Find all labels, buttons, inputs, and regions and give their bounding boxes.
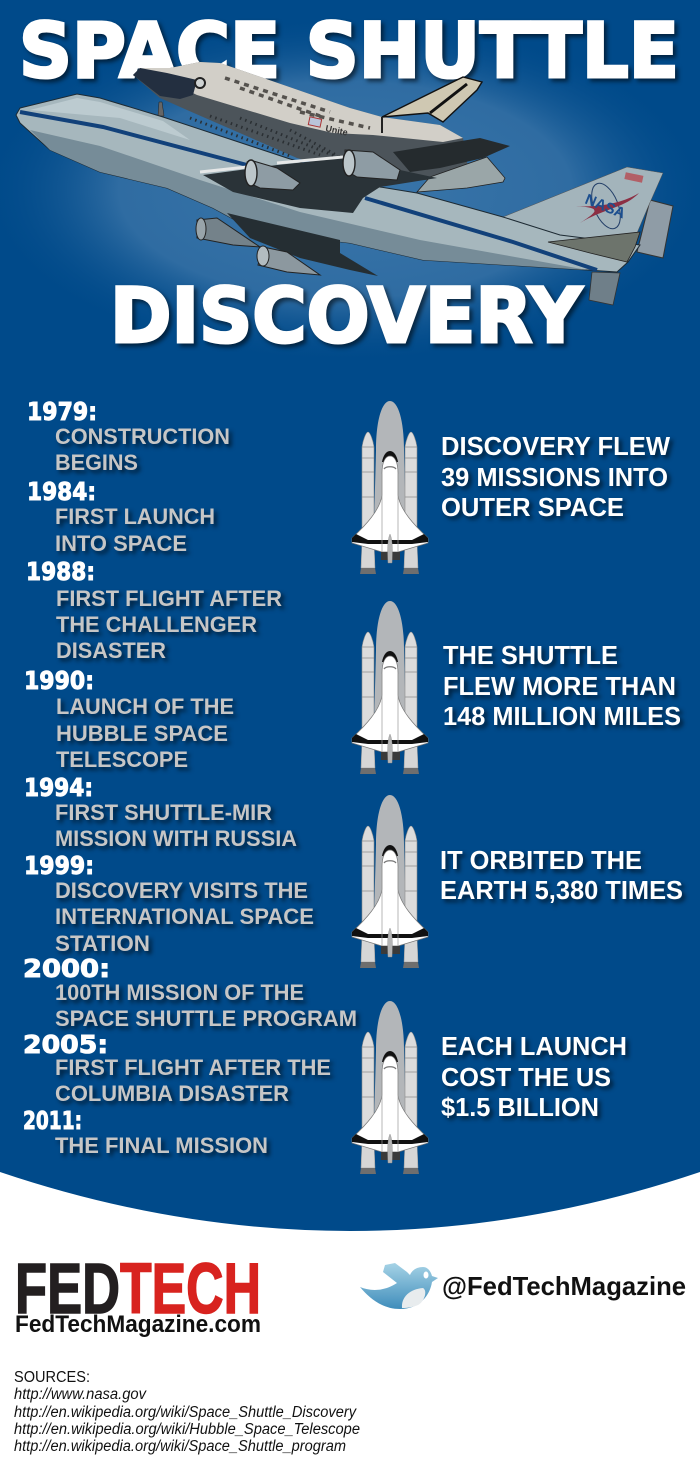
sources: http://en.wikipedia.org/wiki/Space_Shuttle_Discovery [14,1404,357,1421]
sources: SOURCES: [14,1369,90,1386]
2005 entry: COLUMBIA DISASTER [55,1081,289,1106]
2005 entry: 2005: [23,1030,108,1059]
FedTech logo: FED [15,1250,120,1329]
2000 entry [23,954,357,1031]
fact: missions: OUTER SPACE [441,492,624,522]
fact: missions: 39 MISSIONS INTO [441,462,668,492]
FedTech logo [15,1250,261,1338]
2000 entry: SPACE SHUTTLE PROGRAM [55,1006,357,1031]
1990 entry: HUBBLE SPACE [56,721,228,746]
1990 entry: 1990: [24,666,94,695]
lower tailplane [589,272,620,305]
1979 entry: CONSTRUCTION [55,424,230,449]
tailplane [548,232,640,262]
NASA logo: NASA [583,191,628,223]
lower engines [196,218,320,275]
2000 entry: 100TH MISSION OF THE [55,980,304,1005]
sources: http://en.wikipedia.org/wiki/Hubble_Space_Telescope [14,1421,360,1438]
fuselage [16,94,640,272]
upper engines [245,150,400,190]
illustration: 747 carrying the shuttle [16,62,673,305]
sources [14,1369,360,1455]
icon: shuttle 3 [352,795,428,968]
1988 entry [26,557,282,663]
1999 entry: INTERNATIONAL SPACE [55,904,314,929]
1984 entry: FIRST LAUNCH [55,504,215,529]
1994 entry: FIRST SHUTTLE-MIR [55,800,272,825]
timeline [23,397,357,1158]
fact: launch cost [441,1031,627,1122]
1988 entry: THE CHALLENGER [56,612,257,637]
icon: shuttle 2 [352,601,428,774]
FedTech logo: FedTechMagazine.com [15,1311,261,1338]
icon: twitter bird [360,1263,438,1309]
1994 entry: MISSION WITH RUSSIA [55,826,297,851]
1999 entry: STATION [55,931,150,956]
2011 entry: 2011: [23,1106,82,1135]
twitter handle: @FedTechMagazine [442,1271,686,1301]
sources: http://www.nasa.gov [14,1386,147,1403]
1984 entry [27,477,215,556]
fact: launch cost: COST THE US [441,1062,611,1092]
fact: missions: DISCOVERY FLEW [441,431,670,461]
lower wing [227,213,378,276]
1979 entry [27,397,230,475]
fact: miles: THE SHUTTLE [443,640,618,670]
fact: orbits: IT ORBITED THE [440,845,642,875]
1999 entry: DISCOVERY VISITS THE [55,878,308,903]
1988 entry: DISASTER [56,638,166,663]
icon: shuttle 4 [352,1001,428,1174]
header glow [0,0,700,370]
1990 entry [24,666,234,772]
fact: orbits: EARTH 5,380 TIMES [440,875,683,905]
title: Discovery: DISCOVERY [110,271,583,360]
1999 entry [24,851,314,956]
1979 entry: 1979: [27,397,97,426]
fact: launch cost: $1.5 BILLION [441,1092,599,1122]
fact: miles [443,640,681,731]
1979 entry: BEGINS [55,450,138,475]
1990 entry: TELESCOPE [56,747,188,772]
2005 entry [23,1030,331,1106]
1988 entry: FIRST FLIGHT AFTER [56,586,282,611]
icon: shuttle 1 [352,401,428,574]
1999 entry: 1999: [24,851,94,880]
near wing [203,158,437,213]
FedTech logo: TECH [120,1250,261,1329]
wing strake [200,157,343,172]
shuttle orbiter [133,62,482,180]
strut [158,102,164,116]
fact: launch cost: EACH LAUNCH [441,1031,627,1061]
shuttle orbiter: Unite [325,123,349,138]
2005 entry: FIRST FLIGHT AFTER THE [55,1055,331,1080]
2011 entry [23,1106,268,1158]
NASA logo [576,172,643,233]
fact: miles: 148 MILLION MILES [443,701,681,731]
sources: http://en.wikipedia.org/wiki/Space_Shuttle_program [14,1438,346,1455]
vertical fin [503,167,663,250]
fact: missions [441,431,670,522]
far wing [393,138,510,172]
cheatline [20,112,597,270]
2011 entry: THE FINAL MISSION [55,1133,268,1158]
rudder panel [637,200,673,258]
1984 entry: 1984: [27,477,96,506]
1994 entry [24,773,297,851]
1990 entry: LAUNCH OF THE [56,694,234,719]
1988 entry: 1988: [26,557,95,586]
shuttle tail cone [417,157,505,192]
fact: miles: FLEW MORE THAN [443,671,676,701]
fact: orbits [440,845,683,905]
1984 entry: INTO SPACE [55,531,187,556]
2000 entry: 2000: [23,954,110,983]
1994 entry: 1994: [24,773,93,802]
title: Space Shuttle: SPACE SHUTTLE [19,6,679,95]
